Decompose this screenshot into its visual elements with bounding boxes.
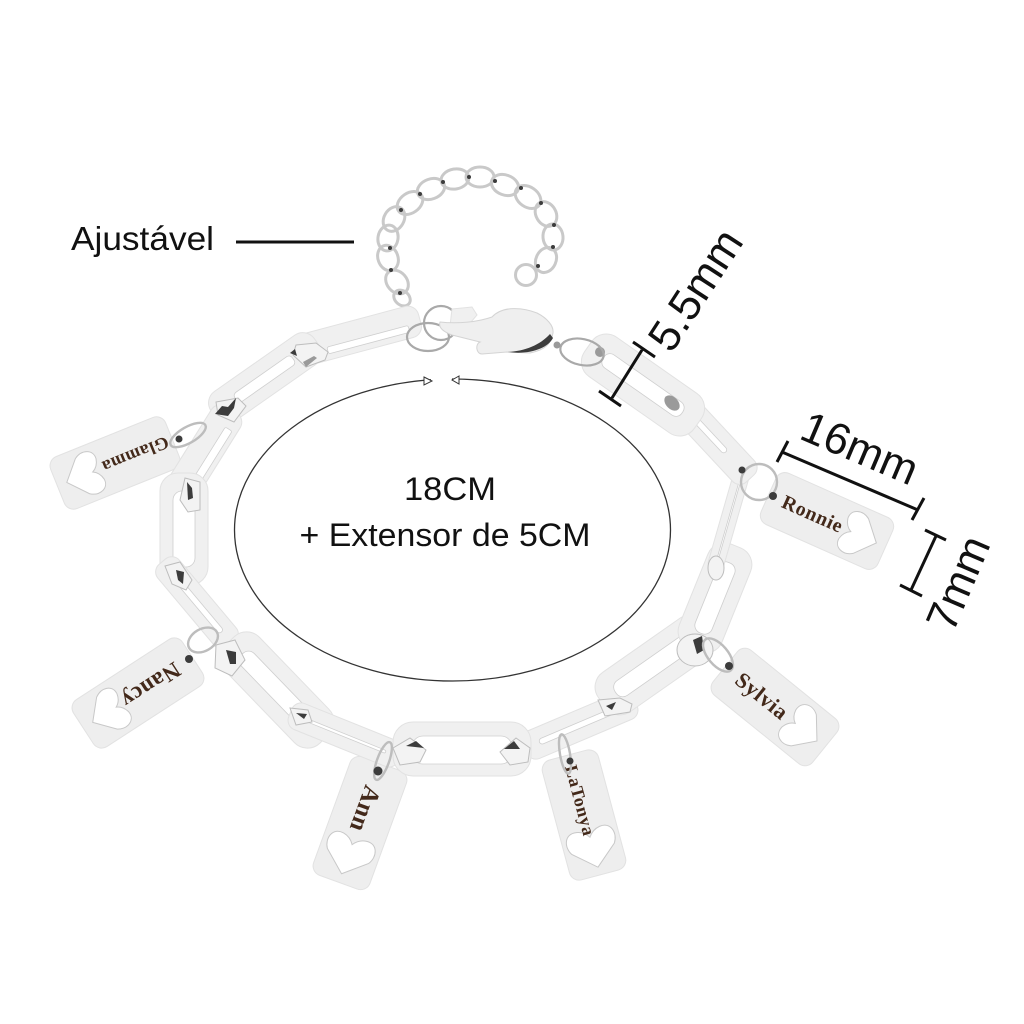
pendant tag: Nancy: Nancy — [117, 657, 185, 714]
dimension: tag length 16mm: 16mm — [794, 402, 926, 495]
pendant tag: LaTonya — [540, 748, 628, 882]
link junction details — [165, 343, 724, 765]
lobster clasp and connector rings — [407, 306, 606, 369]
centre length text — [300, 471, 590, 553]
label: adjustable: Ajustável — [71, 220, 214, 257]
pendant tag: Ronnie: Ronnie — [778, 491, 846, 538]
pendant tag: Ronnie — [757, 469, 897, 573]
pendant tag: Sylvia: Sylvia — [731, 667, 794, 725]
chain links — [152, 304, 761, 776]
pendant tag: Ann: Ann — [344, 782, 385, 836]
pendant tag: LaTonya: LaTonya — [561, 763, 599, 838]
pendant tag: Sylvia — [707, 644, 843, 770]
dimension: tag width 7mm: 7mm — [917, 529, 1000, 638]
leader line to extender — [236, 240, 354, 244]
pendant tag: Glamma: Glamma — [99, 432, 172, 477]
circumference ellipse with arrows — [234, 370, 670, 681]
dimension: tag length 16mm — [777, 402, 926, 520]
dimension: link width 5.5mm: 5.5mm — [639, 220, 753, 360]
pendant tag: Nancy — [68, 634, 208, 752]
dimension: link width 5.5mm — [599, 220, 753, 406]
centre length text: + Extensor de 5CM — [300, 517, 590, 553]
tag jump rings — [167, 418, 777, 782]
pendant tag: Glamma — [47, 414, 183, 512]
centre length text: 18CM — [404, 471, 496, 507]
extender chain — [374, 167, 564, 309]
pendant tag: Ann — [310, 754, 410, 892]
